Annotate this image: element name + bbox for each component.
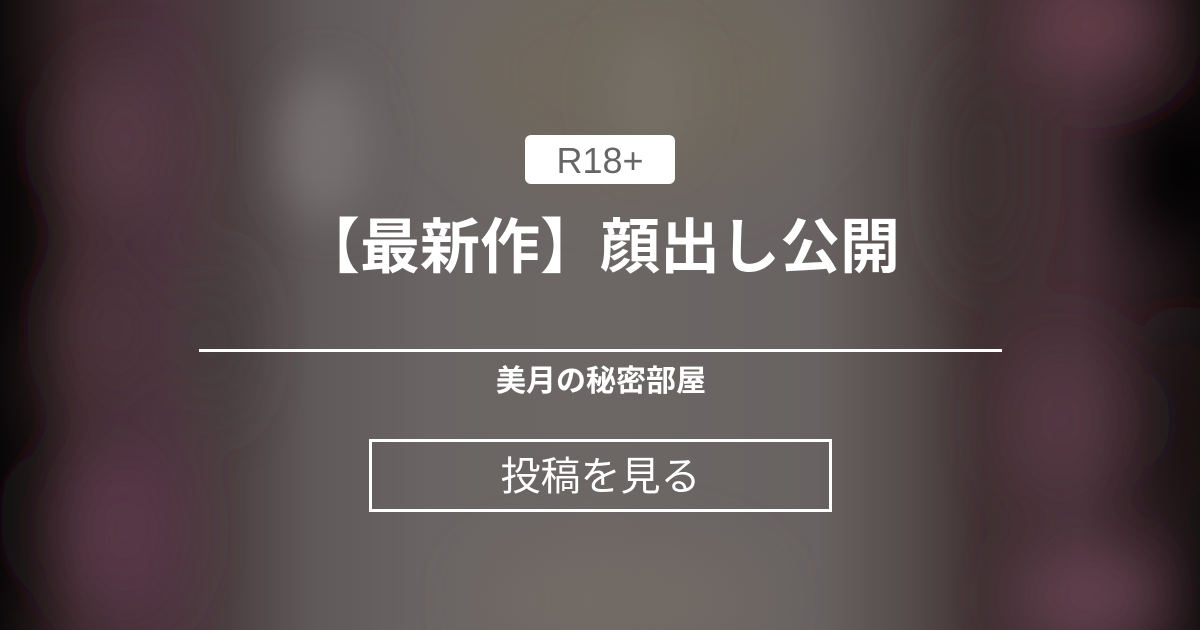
button: view post: 投稿を見る [500, 455, 700, 499]
badge: R18+ [525, 135, 675, 184]
divider line [199, 349, 1002, 352]
author name: 美月の秘密部屋 [496, 365, 706, 398]
badge: R18+: R18+ [556, 140, 644, 181]
button: view post [369, 439, 832, 512]
title: 【最新作】顔出し公開 [300, 214, 900, 281]
